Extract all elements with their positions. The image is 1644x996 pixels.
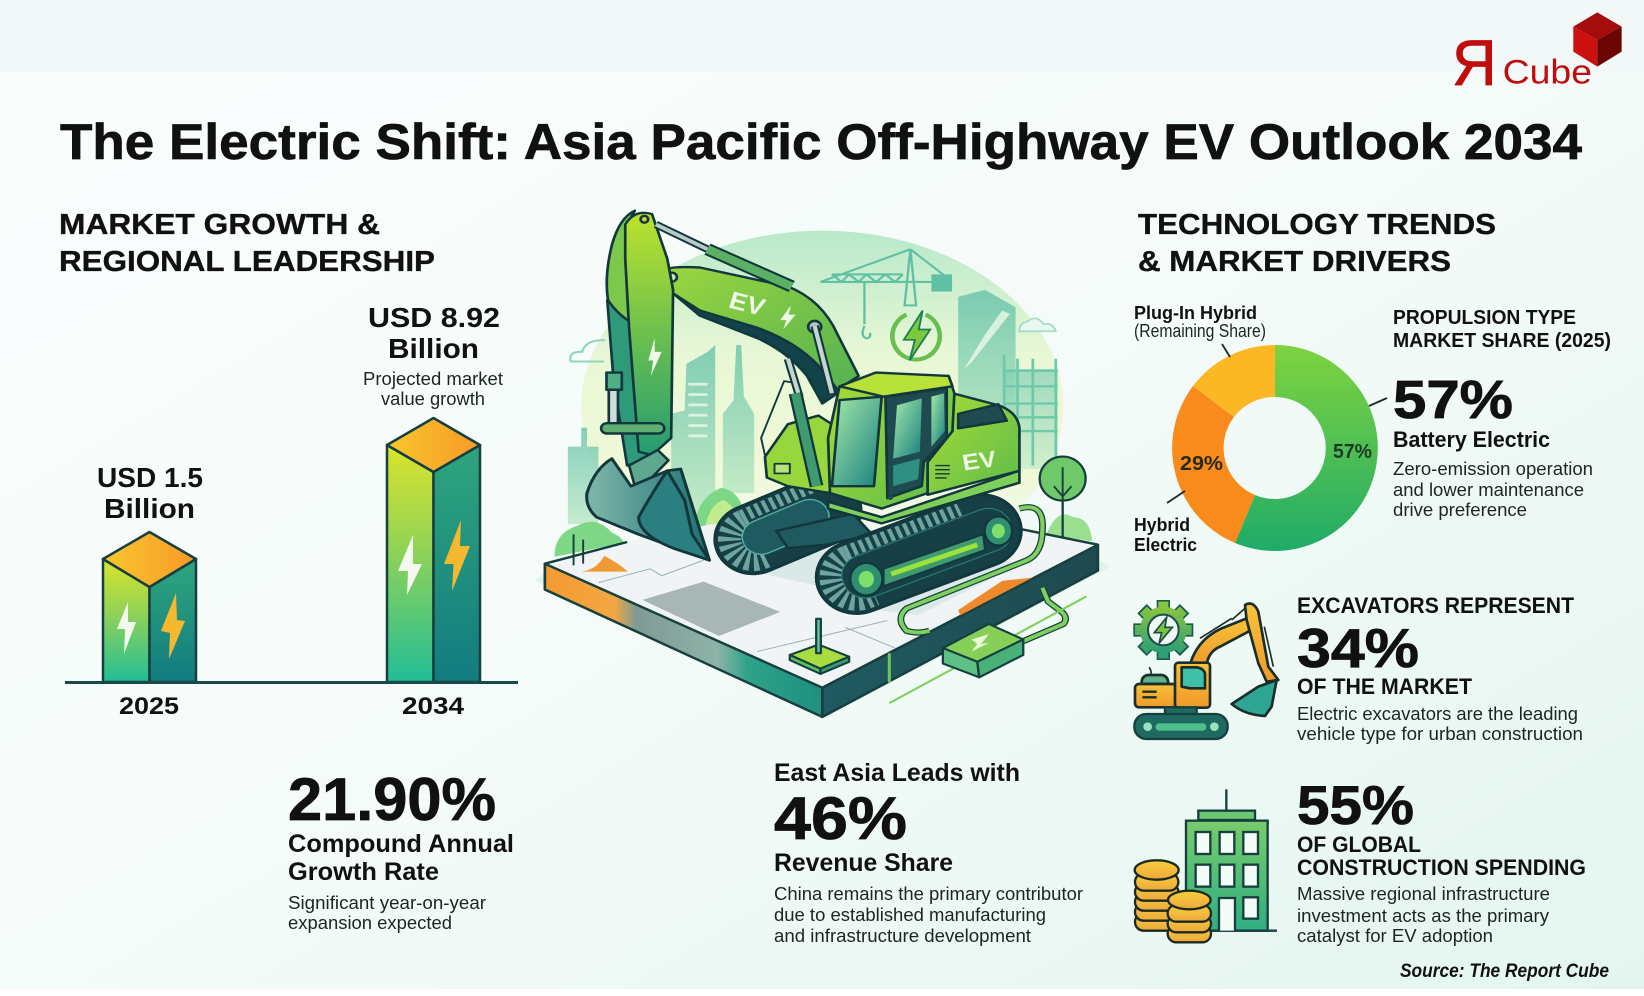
bucket — [587, 459, 709, 560]
heading: market growth: MARKET GROWTH & — [59, 209, 380, 241]
stat: East Asia revenue share: and infrastructure development — [774, 926, 1031, 946]
rear track — [713, 486, 862, 576]
coin stack: short — [1168, 891, 1211, 942]
stat: construction spending 55%: CONSTRUCTION SPENDING — [1297, 855, 1586, 880]
icon: power bolt ring — [892, 311, 940, 360]
platform — [535, 524, 1109, 719]
icon: red cube — [1573, 12, 1622, 67]
label: USD 8.92 Billion: Billion — [388, 333, 479, 364]
segment: battery electric 57% — [1235, 345, 1378, 551]
body: EV — [960, 446, 998, 476]
stat: battery electric 57%: Zero-emission operation — [1393, 459, 1593, 479]
stat: construction spending 55%: catalyst for EV adoption — [1297, 926, 1493, 946]
stat: CAGR: Compound Annual — [288, 830, 514, 858]
stat: battery electric 57%: and lower maintenance — [1393, 480, 1584, 500]
axis labels: 2034 — [402, 693, 465, 720]
donut chart: propulsion type share — [1134, 303, 1387, 555]
crane — [820, 249, 951, 338]
label: plug-in hybrid — [1134, 303, 1266, 341]
stat: excavators 34%: Electric excavators are the leading — [1297, 704, 1578, 724]
bar: 2034 — [387, 418, 480, 682]
excavator arm — [1190, 603, 1278, 716]
excavator cab and engine — [1135, 663, 1210, 708]
heading: technology trends — [1138, 209, 1496, 278]
source note: Source: The Report Cube — [1400, 961, 1609, 982]
axis line — [65, 681, 518, 684]
stat: battery electric 57%: MARKET SHARE (2025) — [1393, 330, 1611, 352]
shadow under tracks — [725, 534, 1018, 615]
label: USD 1.5 Billion — [97, 462, 203, 524]
stat: battery electric 57%: 57% — [1393, 370, 1513, 430]
label: hybrid electric — [1134, 515, 1197, 555]
gear — [1133, 600, 1193, 660]
leader lines — [1167, 344, 1387, 503]
heading: technology trends: & MARKET DRIVERS — [1138, 246, 1451, 278]
stat: East Asia revenue share: China remains the primary contributor — [774, 884, 1083, 904]
stat: East Asia revenue share: due to established manufacturing — [774, 905, 1046, 925]
heading: market growth — [59, 209, 435, 278]
stat: construction spending 55%: 55% — [1297, 774, 1414, 836]
title: The Electric Shift: Asia Pacific Off-Highway EV Outlook 2034 — [60, 114, 1582, 170]
stat: excavators 34%: vehicle type for urban construction — [1297, 724, 1583, 744]
axis labels: 2025 — [119, 693, 179, 720]
bar: 2025 — [103, 532, 196, 682]
label: USD 1.5 Billion: USD 1.5 — [97, 462, 203, 493]
body — [761, 373, 1019, 523]
label: hybrid electric: Electric — [1134, 535, 1197, 555]
icon: building and coins — [1135, 789, 1277, 942]
stat: CAGR: Significant year-on-year — [288, 893, 486, 913]
building — [1186, 789, 1277, 931]
label: USD 8.92 Billion: Projected market — [363, 369, 503, 389]
stat: excavators 34% — [1297, 593, 1583, 744]
stat: East Asia revenue share: Revenue Share — [774, 849, 953, 877]
stat: excavators 34%: OF THE MARKET — [1297, 674, 1473, 699]
stat: battery electric 57%: drive preference — [1393, 500, 1527, 520]
label: USD 8.92 Billion — [363, 302, 503, 409]
stat: East Asia revenue share — [774, 759, 1083, 946]
segment: hybrid electric 29% — [1172, 386, 1255, 543]
logo: RCube — [1452, 12, 1622, 99]
boom hydraulic cylinders — [788, 326, 832, 486]
stat: construction spending 55%: investment acts as the primary — [1297, 906, 1549, 926]
donut labels: 57% — [1333, 441, 1372, 463]
stat: CAGR — [288, 766, 514, 933]
label: USD 8.92 Billion: USD 8.92 — [368, 302, 500, 333]
clouds — [570, 340, 605, 362]
logo wordmark: Я — [1452, 26, 1497, 99]
stat: construction spending 55% — [1297, 774, 1586, 946]
boom — [663, 267, 859, 404]
scaffold grid — [1004, 355, 1058, 466]
track — [1134, 707, 1228, 739]
label: plug-in hybrid: Plug-In Hybrid — [1134, 303, 1257, 323]
stat: battery electric 57%: PROPULSION TYPE — [1393, 307, 1576, 329]
heading: technology trends: TECHNOLOGY TRENDS — [1138, 209, 1496, 241]
bucket — [1232, 680, 1277, 716]
stat: construction spending 55%: OF GLOBAL — [1297, 832, 1421, 857]
logo wordmark — [1452, 26, 1592, 99]
stat: CAGR: 21.90% — [288, 766, 496, 833]
label: plug-in hybrid: (Remaining Share) — [1134, 321, 1266, 341]
boom: EV — [726, 287, 768, 321]
illustration: electric excavator on platform — [535, 211, 1109, 719]
arm stick — [601, 211, 673, 493]
coin stack: tall — [1135, 860, 1179, 931]
label: hybrid electric: Hybrid — [1134, 515, 1190, 535]
bushes — [554, 522, 623, 557]
pedestal marker — [790, 619, 849, 674]
tree — [1040, 457, 1092, 552]
stat: East Asia revenue share: 46% — [774, 785, 907, 852]
stat: construction spending 55%: Massive regional infrastructure — [1297, 884, 1550, 904]
stat: excavators 34%: 34% — [1297, 617, 1419, 679]
label: USD 1.5 Billion: Billion — [104, 493, 195, 524]
bar chart: market value 2025 vs 2034 — [65, 302, 518, 720]
stat: East Asia revenue share: East Asia Leads with — [774, 759, 1020, 787]
background city scene — [554, 231, 1092, 583]
upper hydraulic cylinder — [656, 224, 792, 286]
donut labels: 29% — [1180, 453, 1223, 475]
front track — [814, 494, 1023, 615]
charging cable and unit — [889, 507, 1086, 703]
stat: battery electric 57% — [1393, 307, 1611, 520]
label: USD 8.92 Billion: value growth — [381, 389, 485, 409]
undercarriage — [776, 514, 872, 548]
logo wordmark: Cube — [1503, 53, 1592, 91]
stat: battery electric 57%: Battery Electric — [1393, 427, 1550, 452]
donut labels — [1180, 441, 1372, 475]
stat: CAGR: Growth Rate — [288, 858, 439, 886]
stat: CAGR: expansion expected — [288, 913, 452, 933]
segment: plug-in hybrid — [1193, 345, 1275, 417]
axis labels — [119, 693, 465, 720]
icon: excavator with gear — [1133, 600, 1278, 739]
heading: market growth: REGIONAL LEADERSHIP — [59, 246, 435, 278]
stat: excavators 34%: EXCAVATORS REPRESENT — [1297, 593, 1575, 618]
